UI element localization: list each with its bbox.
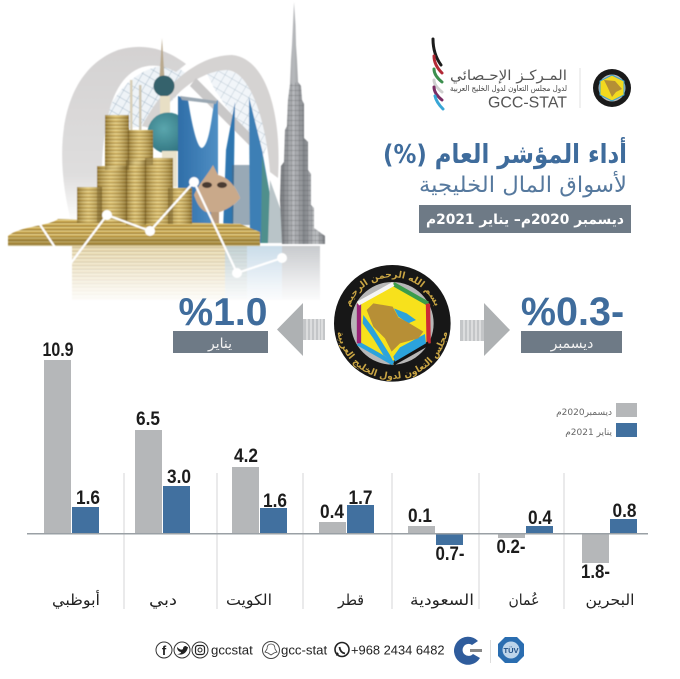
Kuwait towers [130, 38, 188, 187]
small GCC emblem [593, 69, 631, 107]
category labels: الكويت [226, 591, 272, 609]
icon: whatsapp [335, 642, 349, 656]
Bahrain World Trade Center [223, 97, 288, 243]
icon: coloured feather [433, 39, 443, 109]
category labels: دبي [149, 591, 177, 610]
Burj Khalifa [280, 2, 325, 244]
icon: facebook [156, 642, 172, 658]
January bars [72, 486, 637, 545]
right arrow: December [460, 303, 510, 356]
value labels: 10.9 [42, 340, 74, 361]
ring text: bottom: مجلس التعاون لدول الخليج العربية [337, 332, 448, 381]
date banner [419, 205, 631, 233]
legend [556, 403, 637, 438]
footer contacts [156, 637, 524, 665]
gold coin stacks [8, 115, 260, 246]
December headline value: %0.3- [521, 290, 624, 334]
value labels: 0.7- [436, 544, 464, 565]
December headline value: ديسمبر [550, 336, 593, 352]
value labels: 4.2 [234, 446, 258, 467]
category labels: أبوظبي [52, 590, 100, 610]
value labels: 0.4 [320, 502, 344, 523]
value labels: 0.1 [408, 506, 432, 527]
icon: certification G mark [454, 637, 482, 665]
value labels: 0.8 [612, 501, 636, 522]
ring text: top: بسم الله الرحمن الرحيم [348, 270, 438, 308]
Kingdom Centre tower [178, 96, 218, 225]
value labels: 6.5 [136, 409, 160, 430]
white trend line with dots [35, 177, 287, 278]
handle: gccstat: gccstat [211, 642, 253, 658]
bar chart [27, 340, 648, 610]
value labels: 1.6 [263, 491, 287, 512]
icon: twitter [174, 642, 190, 658]
category labels: السعودية [410, 591, 474, 609]
hero illustration: Gulf landmarks and gold coins [8, 2, 326, 305]
category labels: عُمان [508, 591, 540, 609]
icon: TUV badge [498, 637, 524, 663]
date banner: ديسمبر 2020م– يناير 2021م [426, 212, 624, 228]
value labels: 0.2- [496, 537, 526, 558]
title: أداء المؤشر العام (%) [383, 137, 627, 170]
GCC-STAT logo [433, 39, 580, 112]
map: Arabian peninsula [367, 303, 423, 352]
hexagon coloured edges [358, 284, 429, 363]
category labels: البحرين [586, 591, 634, 609]
January headline value: يناير [207, 336, 232, 352]
arches and lattice dome [62, 47, 279, 225]
January headline value: %1.0 [179, 291, 267, 334]
icon: instagram [192, 642, 208, 658]
Oman monument [194, 165, 240, 227]
value labels [42, 340, 636, 583]
category labels: قطر [337, 591, 364, 609]
December bars [44, 360, 609, 563]
category labels [52, 590, 634, 610]
January headline value [173, 291, 268, 353]
icon: TUV badge: TÜV [504, 646, 518, 655]
legend: يناير 2021م [565, 428, 612, 438]
logo Arabic name: المـركـز الإحـصائي [450, 68, 567, 84]
December headline value [521, 290, 624, 353]
left arrow: January [277, 303, 325, 356]
icon: snapchat [262, 642, 280, 658]
map: sea [363, 308, 426, 362]
value labels: 3.0 [167, 467, 191, 488]
legend: ديسمبر2020م [556, 408, 612, 418]
reflection on the floor [8, 245, 326, 305]
subtitle: لأسواق المال الخليجية [419, 171, 627, 198]
handle: gcc-stat: gcc-stat [281, 642, 328, 658]
value labels: 1.8- [581, 562, 610, 583]
value labels: 1.6 [76, 488, 100, 509]
phone number: +968 2434 6482 [351, 642, 445, 658]
icon: facebook: f [162, 643, 167, 658]
logo Arabic subtitle: لدول مجلس التعاون لدول الخليج العربية [450, 84, 567, 93]
value labels: 1.7 [348, 488, 372, 509]
logo GCC-STAT wordmark: GCC-STAT [488, 94, 568, 112]
value labels: 0.4 [528, 508, 552, 529]
central GCC emblem [334, 265, 451, 382]
